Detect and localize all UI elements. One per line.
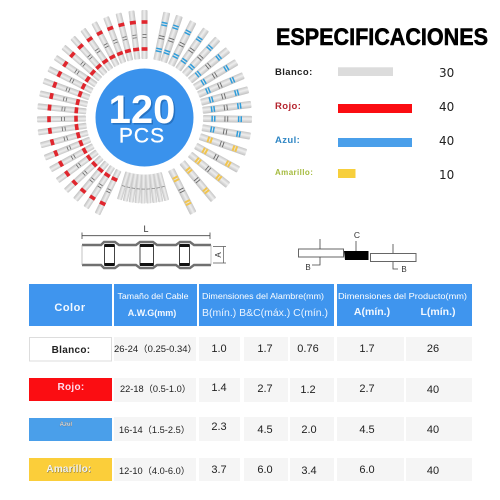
wire diameter diagram B and C: B [401, 265, 407, 274]
row: Amarillo: 3.7 [211, 464, 227, 476]
row: Amarillo: 12-10（4.0-6.0） [119, 466, 190, 476]
legend row: Azul: 40 [439, 134, 454, 148]
blue badge: 120 PCS: PCS [119, 124, 165, 148]
table header: Dimensiones del Producto(mm) [338, 292, 467, 301]
legend row: Azul [275, 134, 454, 148]
row: Rojo: 1.4 [211, 382, 227, 394]
row: Rojo: 2.7 [359, 383, 375, 395]
row: Rojo: 40 [427, 384, 439, 396]
row: Rojo: 2.7 [257, 383, 273, 395]
row: Azul: 16-14（1.5-2.5） [119, 425, 190, 435]
row: Amarillo: Amarillo: [47, 464, 92, 476]
row: Blanco: 1.7 [257, 343, 273, 355]
table header: B(mín.) B&C(máx.) C(mín.) [202, 308, 328, 319]
row: Azul: 2.0 [301, 424, 317, 436]
row: Blanco: 1.7 [359, 343, 375, 355]
table header: L(mín.) [420, 306, 456, 318]
blue badge: 120 PCS: 120 [110, 90, 177, 134]
legend row: Amarillo: Amarillo: [275, 168, 313, 177]
table header: Tamaño del Cable [118, 292, 189, 301]
table header: Dimensiones del Alambre(mm) [202, 292, 324, 301]
legend row: Azul: Azul: [275, 135, 300, 146]
row: Amarillo: 40 [427, 465, 439, 477]
radial ring of connectors [37, 10, 252, 215]
row: Blanco: 0.76 [297, 343, 319, 355]
row: Amarillo: 6.0 [257, 464, 273, 476]
wire diameter diagram B and C: C [354, 230, 360, 240]
table header: Color [54, 302, 86, 314]
row: Rojo: 22-18（0.5-1.0） [120, 384, 191, 394]
legend row: Blanco: 30 [439, 66, 454, 80]
row: Amarillo: 6.0 [359, 464, 375, 476]
blue badge: 120 PCS: 120 [109, 88, 175, 132]
legend row: Amarillo [275, 168, 454, 182]
row: Rojo [29, 378, 472, 402]
row: Blanco: 26-24（0.25-0.34） [114, 344, 197, 354]
red connectors [37, 10, 147, 215]
table header: A(mín.) [354, 306, 390, 318]
wire diameter diagram B and C: B [305, 263, 311, 272]
row: Azul: 2.3 [211, 421, 227, 433]
row: Azul: 4.5 [257, 424, 273, 436]
row: Blanco: Blanco: [52, 345, 90, 356]
row: Blanco: 26 [427, 343, 439, 355]
connector dimension diagram L and A: A [214, 252, 223, 258]
row: Rojo: Rojo: [57, 382, 85, 393]
row: Azul: 40 [427, 424, 439, 436]
legend row: Amarillo: 10 [439, 168, 454, 182]
row: Amarillo: Amarillo: [46, 464, 92, 475]
legend row: Blanco: Blanco: [275, 67, 313, 78]
row: Blanco: 1.0 [211, 343, 227, 355]
connector dimension diagram L and A: L [143, 224, 149, 234]
table header [29, 284, 472, 326]
blue connectors [153, 12, 252, 140]
row: Azul: Azul [60, 422, 73, 428]
specification table [29, 284, 472, 481]
legend row: Rojo: 40 [439, 100, 454, 114]
table header: A.W.G(mm) [128, 308, 176, 318]
white connectors [117, 171, 169, 204]
row: Rojo: 1.2 [300, 384, 316, 396]
blue badge: 120 PCS [96, 68, 194, 166]
row: Amarillo: 3.4 [301, 465, 317, 477]
row: Amarillo [29, 458, 472, 481]
wire diameter diagram B and C [298, 230, 416, 274]
row: Azul: 4.5 [359, 424, 375, 436]
legend row: Rojo [275, 100, 454, 114]
legend: quantities per colour [275, 66, 454, 182]
legend row: Blanco [275, 66, 454, 80]
row: Azul [29, 417, 472, 441]
yellow connectors [168, 133, 247, 215]
connector dimension diagram L and A [82, 224, 226, 268]
row: Blanco [30, 337, 472, 361]
legend row: Rojo: Rojo: [275, 101, 301, 112]
